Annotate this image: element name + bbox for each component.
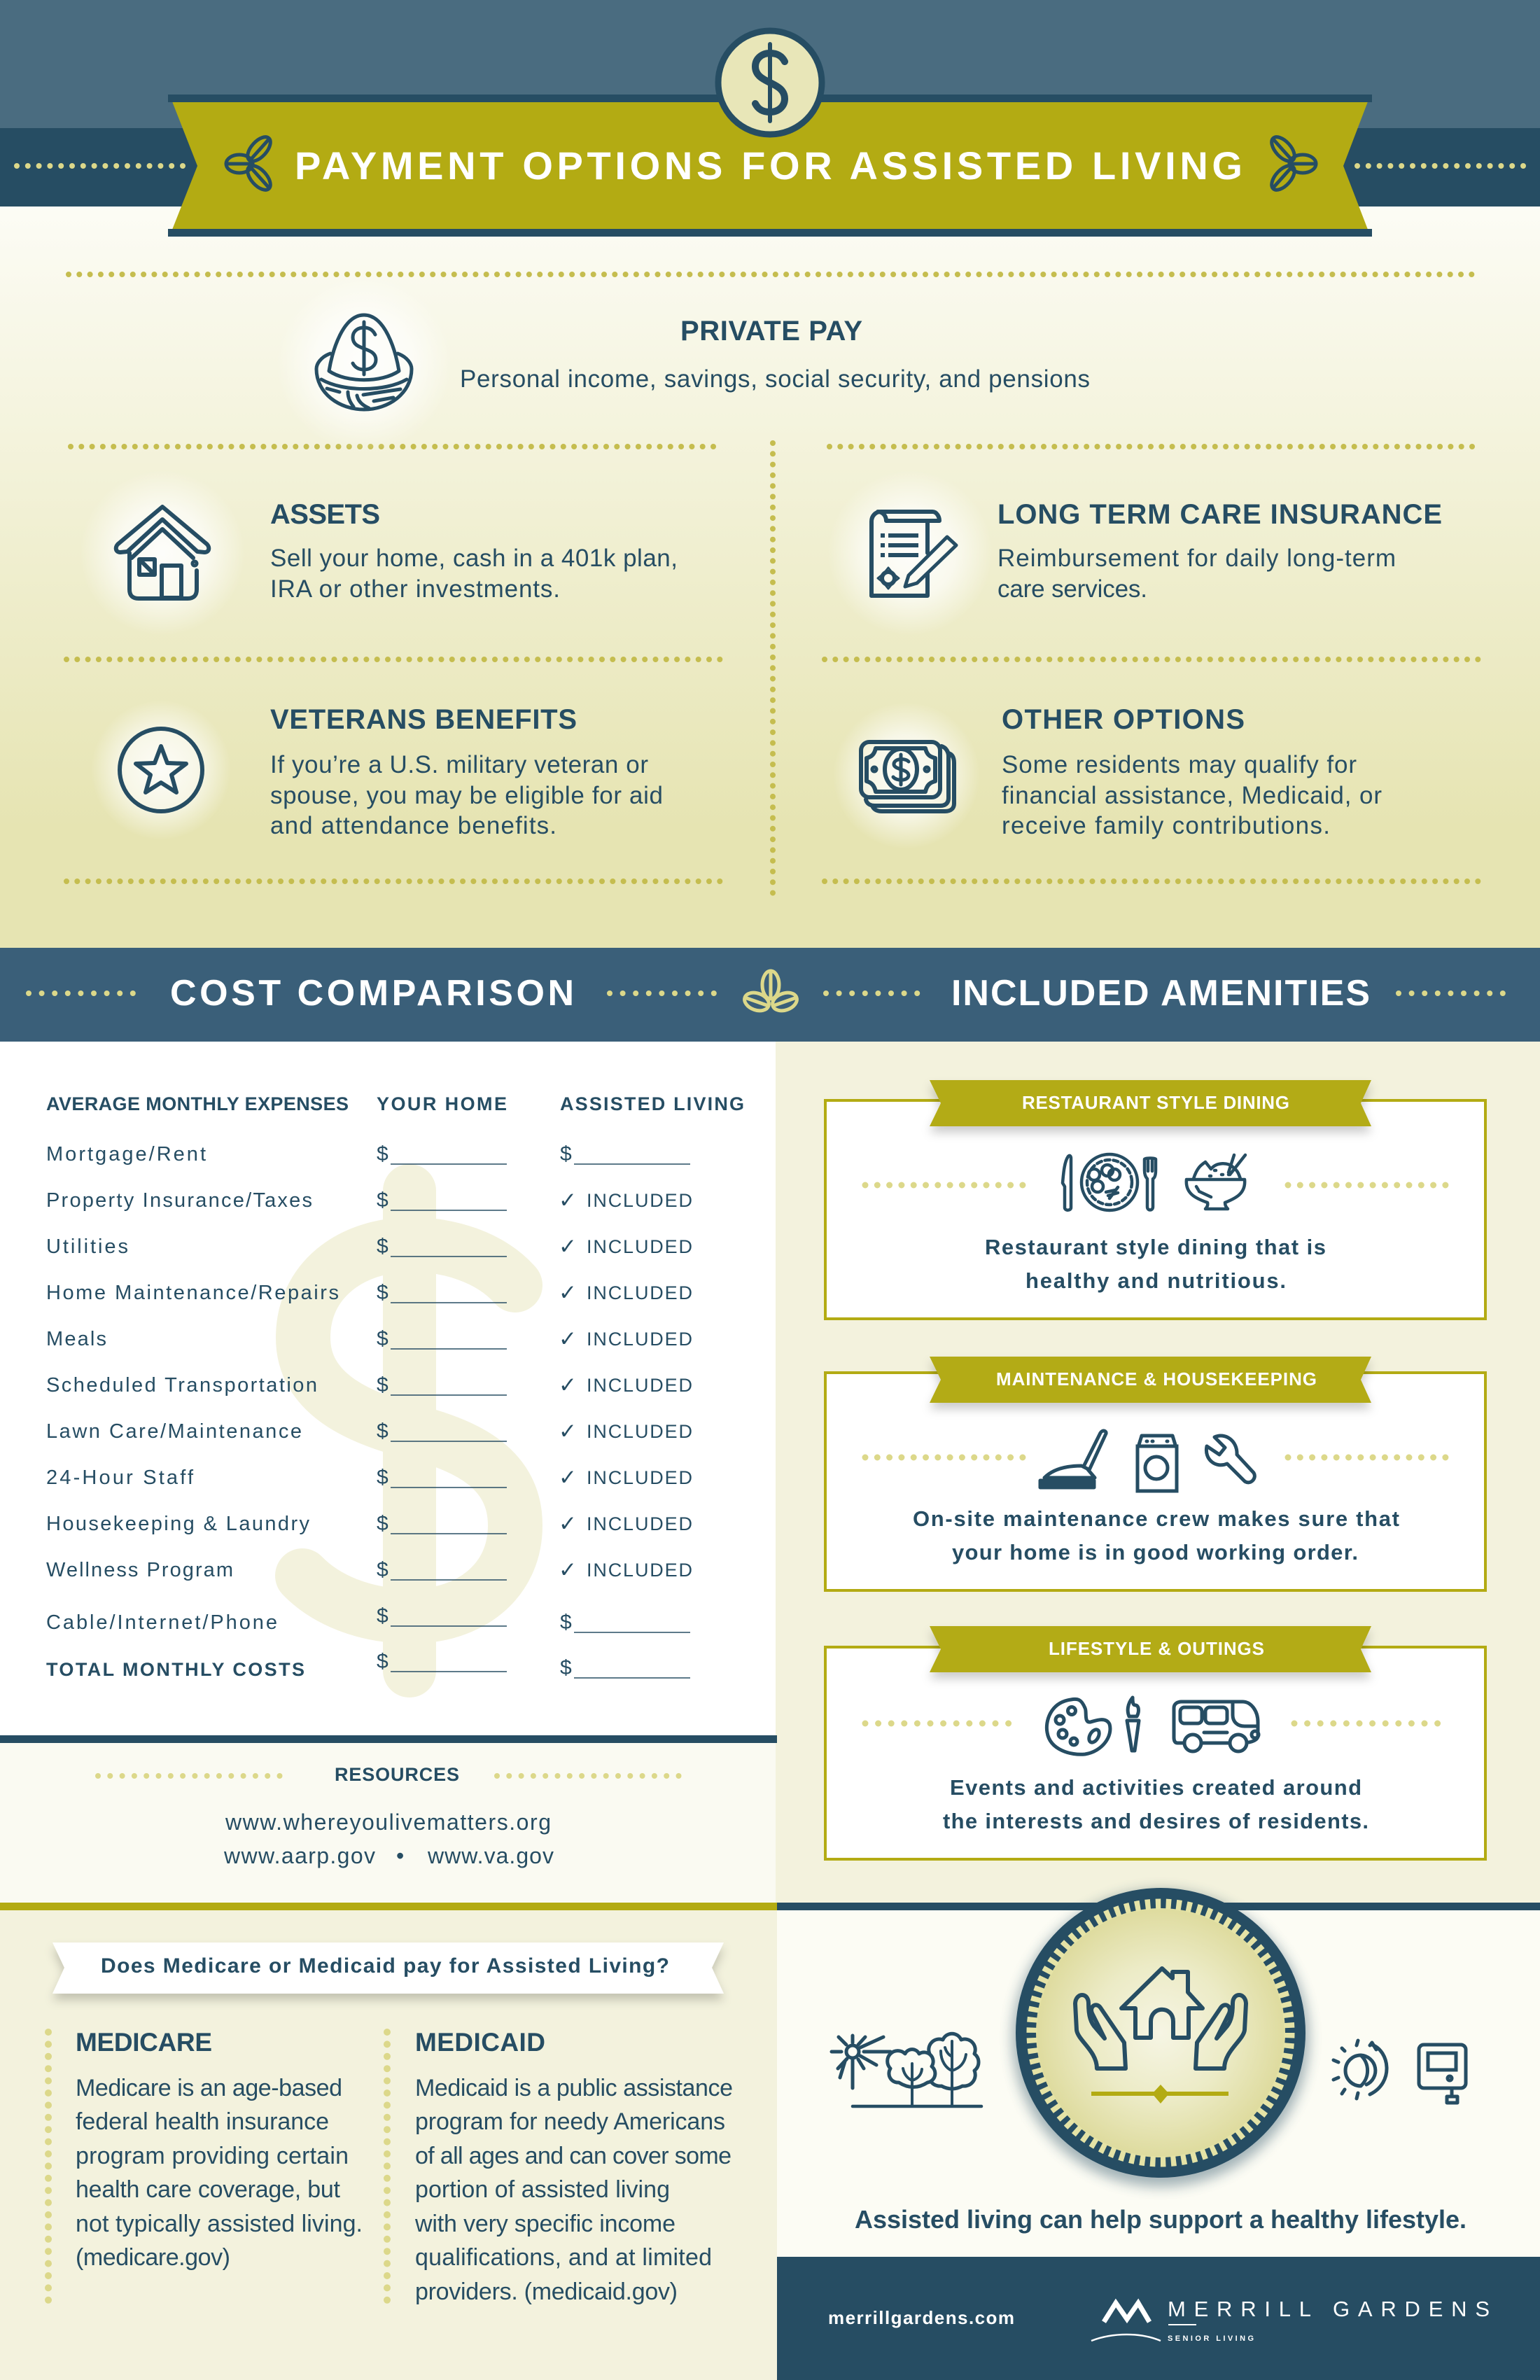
row: total: $ xyxy=(377,1650,388,1673)
row: property: Property Insurance/Taxes xyxy=(46,1189,312,1212)
text: resources links: www.va.gov xyxy=(427,1843,554,1868)
panel: medicaid xyxy=(387,2028,733,2305)
text: long term care: Reimbursement for daily long-term xyxy=(997,545,1396,572)
row: utilities: $ xyxy=(377,1235,388,1258)
text: other options: Some residents may qualify for xyxy=(1002,751,1357,778)
icon: dollar coin xyxy=(718,31,822,134)
row: transportation: ✓ xyxy=(559,1373,577,1398)
row: meals: INCLUDED xyxy=(587,1329,692,1350)
row: utilities: ✓ xyxy=(559,1234,577,1259)
text: resources links: • xyxy=(396,1843,404,1868)
icon: plate and cutlery xyxy=(1063,1154,1156,1210)
ribbon: maintenance xyxy=(930,1357,1371,1403)
text: dining: Restaurant style dining that is xyxy=(985,1235,1326,1259)
panel: veterans benefits xyxy=(120,704,663,839)
text: medicaid: qualifications, and at limited xyxy=(415,2244,712,2271)
text: lifestyle: the interests and desires of residents. xyxy=(943,1809,1368,1833)
text: veterans: If you’re a U.S. military veteran or xyxy=(270,751,648,778)
panel: footer xyxy=(777,2257,1540,2380)
row: cable: $ xyxy=(560,1611,572,1634)
text: private pay: Personal income, savings, social security, and pensions xyxy=(460,365,1090,393)
panel: other options xyxy=(861,704,1382,839)
text: medicare: federal health insurance xyxy=(76,2108,329,2135)
ribbon: medicare question: Does Medicare or Medicaid pay for Assisted Living? xyxy=(101,1954,669,1977)
text: resources links: www.whereyoulivematters.org xyxy=(225,1809,551,1835)
text: other options: financial assistance, Medicaid, or xyxy=(1002,782,1382,809)
icon: palette xyxy=(1046,1699,1110,1754)
row: meals: $ xyxy=(377,1327,388,1350)
text: long term care: care services. xyxy=(997,575,1147,603)
icon: paintbrush xyxy=(1127,1698,1139,1751)
row: wellness: ✓ xyxy=(559,1558,577,1583)
text: other options: receive family contributions. xyxy=(1002,812,1330,839)
icon: bus xyxy=(1174,1702,1259,1751)
icon: thermostat xyxy=(1419,2045,1466,2103)
ribbon: medicare question xyxy=(52,1942,724,1994)
icon: house xyxy=(1121,1968,1203,2038)
row: cable: Cable/Internet/Phone xyxy=(46,1611,277,1634)
dotted rules xyxy=(66,274,1484,896)
text: medicare: Medicare is an age-based xyxy=(76,2075,342,2101)
logo: merrill gardens: MERRILL GARDENS xyxy=(1168,2297,1490,2321)
panel: assets xyxy=(116,499,678,603)
row: home maintenance: $ xyxy=(377,1281,388,1304)
row: housekeeping: ✓ xyxy=(559,1511,577,1536)
text: veterans: spouse, you may be eligible for aid xyxy=(270,782,663,809)
icon: right hand xyxy=(1196,1995,1246,2068)
table header: ASSISTED LIVING xyxy=(560,1093,744,1114)
row: transportation: $ xyxy=(377,1373,388,1396)
ribbon text: dining: RESTAURANT STYLE DINING xyxy=(1022,1092,1289,1113)
icon: wrench xyxy=(1206,1436,1254,1483)
logo: merrill gardens xyxy=(1091,2297,1490,2343)
panel: long term care insurance xyxy=(872,499,1442,603)
heading: long term care: LONG TERM CARE INSURANCE xyxy=(997,499,1442,530)
row: wellness: Wellness Program xyxy=(46,1559,233,1581)
medallion xyxy=(1012,1888,1309,2187)
panel: maintenance and housekeeping xyxy=(825,1357,1485,1590)
icon: washer xyxy=(1138,1436,1177,1491)
row: cable xyxy=(46,1604,690,1634)
row: staff: 24-Hour Staff xyxy=(46,1466,194,1489)
row: total: TOTAL MONTHLY COSTS xyxy=(46,1659,304,1680)
text: medicare: health care coverage, but xyxy=(76,2176,341,2203)
heading: assets: ASSETS xyxy=(270,499,380,530)
icon: cash stack xyxy=(861,742,954,811)
row: mortgage: Mortgage/Rent xyxy=(46,1143,206,1166)
table header: AVERAGE MONTHLY EXPENSES xyxy=(46,1093,349,1114)
row: property xyxy=(46,1188,692,1213)
text: medicaid: with very specific income xyxy=(414,2211,676,2237)
icon: star badge xyxy=(120,729,202,811)
ribbon text: maintenance: MAINTENANCE & HOUSEKEEPING xyxy=(996,1368,1317,1390)
icon: rice bowl xyxy=(1186,1155,1245,1209)
row: staff xyxy=(46,1465,692,1490)
row: home maintenance: Home Maintenance/Repairs xyxy=(46,1282,339,1304)
row: housekeeping: $ xyxy=(377,1512,388,1535)
row: total xyxy=(46,1650,690,1680)
text: medicaid: portion of assisted living xyxy=(415,2176,670,2203)
panel: private pay xyxy=(316,315,1090,410)
row: housekeeping: Housekeeping & Laundry xyxy=(46,1513,309,1535)
heading: veterans: VETERANS BENEFITS xyxy=(270,704,577,735)
text: resources links: www.aarp.gov xyxy=(223,1843,375,1868)
heading: other options: OTHER OPTIONS xyxy=(1002,704,1245,735)
section band xyxy=(0,948,1540,1042)
text: website: merrillgardens.com xyxy=(828,2307,1014,2328)
icon: leaves xyxy=(742,971,799,1014)
icon: vacuum xyxy=(1040,1431,1106,1488)
icon: contract and pen xyxy=(872,512,956,596)
icon: leaf ornament left xyxy=(226,133,274,194)
row: lawn care: Lawn Care/Maintenance xyxy=(46,1420,302,1443)
row: meals: Meals xyxy=(46,1328,106,1350)
title banner xyxy=(168,94,1372,237)
text: assets: IRA or other investments. xyxy=(270,575,560,603)
text: veterans: and attendance benefits. xyxy=(270,812,556,839)
row: transportation: INCLUDED xyxy=(587,1375,692,1396)
row: staff: ✓ xyxy=(559,1465,577,1490)
row: property: INCLUDED xyxy=(587,1190,692,1211)
row: mortgage: $ xyxy=(560,1142,572,1166)
text: medicaid: Medicaid is a public assistance xyxy=(415,2075,733,2101)
row: lawn care xyxy=(46,1419,692,1444)
icon: day and night cycle xyxy=(1334,2040,1387,2099)
icon: sun and trees xyxy=(832,2033,981,2106)
text: medicare: not typically assisted living. xyxy=(76,2211,363,2237)
header dots left xyxy=(17,163,186,169)
panel: restaurant style dining xyxy=(825,1080,1485,1319)
row: housekeeping: INCLUDED xyxy=(587,1513,692,1534)
row: lawn care: ✓ xyxy=(559,1419,577,1444)
table header: YOUR HOME xyxy=(377,1093,507,1114)
ribbon: dining xyxy=(930,1080,1371,1126)
heading: medicaid: MEDICAID xyxy=(415,2028,545,2057)
row: cable: $ xyxy=(377,1604,388,1628)
header dots right xyxy=(1357,163,1526,169)
heading: private pay: PRIVATE PAY xyxy=(680,316,862,346)
row: meals: ✓ xyxy=(559,1326,577,1352)
heading: medicare: MEDICARE xyxy=(76,2028,212,2057)
logo: merrill gardens: SENIOR LIVING xyxy=(1168,2334,1254,2343)
icon: nest egg xyxy=(316,315,412,410)
panel: lifestyle and outings xyxy=(825,1626,1485,1859)
row: home maintenance xyxy=(46,1280,692,1306)
row: meals xyxy=(46,1326,692,1352)
panel: medicare xyxy=(48,2028,363,2304)
heading: resources: RESOURCES xyxy=(335,1764,459,1785)
row: utilities: Utilities xyxy=(46,1236,128,1258)
text: maintenance: your home is in good working order. xyxy=(952,1540,1358,1564)
text: medicaid: providers. (medicaid.gov) xyxy=(415,2278,678,2305)
panel: cost comparison table xyxy=(46,1093,744,1680)
row: home maintenance: INCLUDED xyxy=(587,1282,692,1303)
text: medicare: program providing certain xyxy=(76,2143,349,2169)
row: housekeeping xyxy=(46,1511,692,1536)
row: wellness: $ xyxy=(377,1558,388,1581)
icon: house xyxy=(116,507,209,598)
ribbon: lifestyle xyxy=(930,1626,1371,1672)
row: transportation: Scheduled Transportation xyxy=(46,1374,317,1396)
row: property: $ xyxy=(377,1189,388,1212)
text: lifestyle: Events and activities created around xyxy=(950,1775,1362,1800)
row: lawn care: INCLUDED xyxy=(587,1421,692,1442)
rule: right column top of lifestyle block xyxy=(777,1903,1540,1910)
row: lawn care: $ xyxy=(377,1420,388,1443)
text: dining: healthy and nutritious. xyxy=(1026,1268,1286,1293)
heading: cost comparison: COST COMPARISON xyxy=(170,973,574,1014)
row: property: ✓ xyxy=(559,1188,577,1213)
row: staff: $ xyxy=(377,1466,388,1489)
heading: included amenities: INCLUDED AMENITIES xyxy=(951,973,1370,1014)
row: wellness: INCLUDED xyxy=(587,1560,692,1581)
title: PAYMENT OPTIONS FOR ASSISTED LIVING xyxy=(295,144,1242,188)
text: maintenance: On-site maintenance crew makes sure that xyxy=(913,1506,1399,1531)
row: total: $ xyxy=(560,1656,572,1679)
row: home maintenance: ✓ xyxy=(559,1280,577,1306)
icon glows xyxy=(80,276,993,849)
table header xyxy=(46,1093,744,1114)
row: utilities: INCLUDED xyxy=(587,1236,692,1257)
icon: leaf ornament right xyxy=(1268,133,1316,194)
text: assets: Sell your home, cash in a 401k plan, xyxy=(270,545,678,572)
icon: left hand xyxy=(1075,1995,1126,2068)
text: medicare: (medicare.gov) xyxy=(76,2244,230,2271)
panel: resources xyxy=(0,1735,777,1910)
text: healthy lifestyle: Assisted living can help support a healthy lifestyle. xyxy=(855,2205,1466,2234)
row: utilities xyxy=(46,1234,692,1259)
text: medicaid: of all ages and can cover some xyxy=(415,2143,732,2169)
row: transportation xyxy=(46,1373,692,1398)
row: staff: INCLUDED xyxy=(587,1467,692,1488)
row: mortgage: $ xyxy=(377,1142,388,1166)
ribbon text: lifestyle: LIFESTYLE & OUTINGS xyxy=(1049,1638,1264,1659)
watermark dollar sign xyxy=(302,1191,515,1671)
row: mortgage xyxy=(46,1142,690,1166)
text: medicaid: program for needy Americans xyxy=(415,2108,725,2135)
row: wellness xyxy=(46,1558,692,1583)
